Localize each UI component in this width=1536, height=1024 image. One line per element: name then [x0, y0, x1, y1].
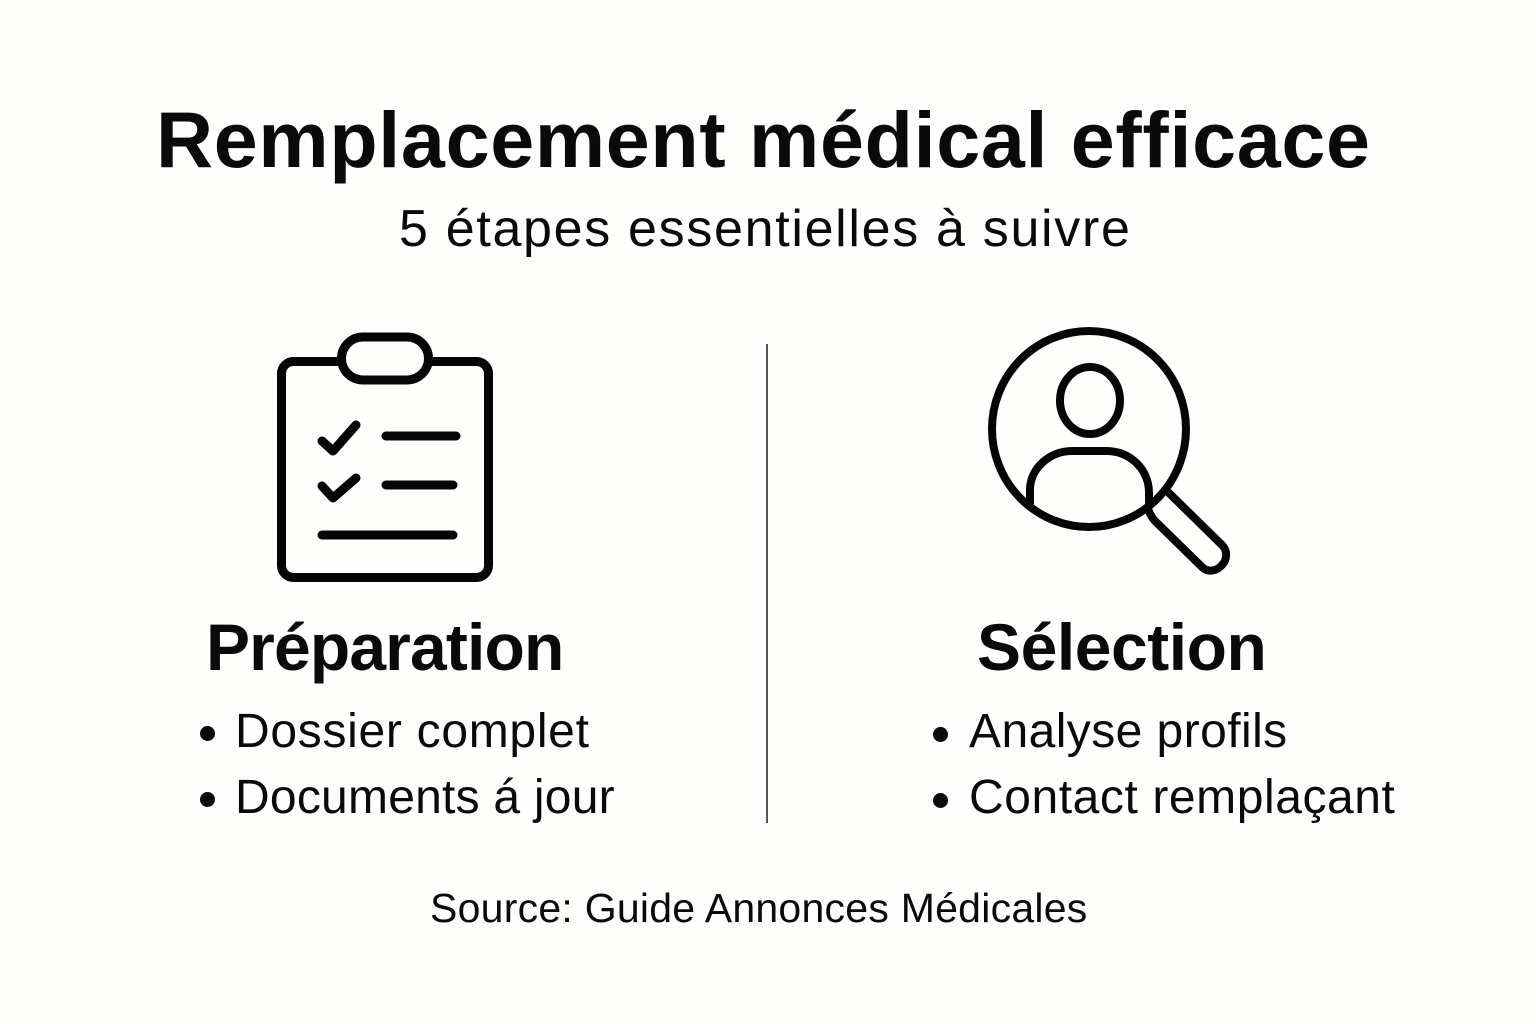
list: Sélection [933, 705, 1395, 824]
bullet item: Analyse profils: Analyse profils [969, 705, 1288, 758]
icon: clipboard checklist [277, 332, 493, 582]
icon: magnifier with person [988, 327, 1230, 575]
bullet item: Contact remplaçant: Contact remplaçant [969, 771, 1395, 824]
list: Préparation [200, 705, 615, 824]
subtitle: 5 étapes essentielles à suivre [399, 200, 1132, 258]
heading: Sélection: Sélection [977, 610, 1266, 684]
bullet item: Documents á jour: Documents á jour [235, 771, 615, 824]
source: Source: Guide Annonces Médicales [430, 885, 1088, 931]
divider line [766, 344, 768, 823]
bullet item: Dossier complet: Dossier complet [235, 705, 590, 758]
title: Remplacement médical efficace [156, 95, 1371, 184]
heading: Préparation: Préparation [206, 610, 563, 684]
